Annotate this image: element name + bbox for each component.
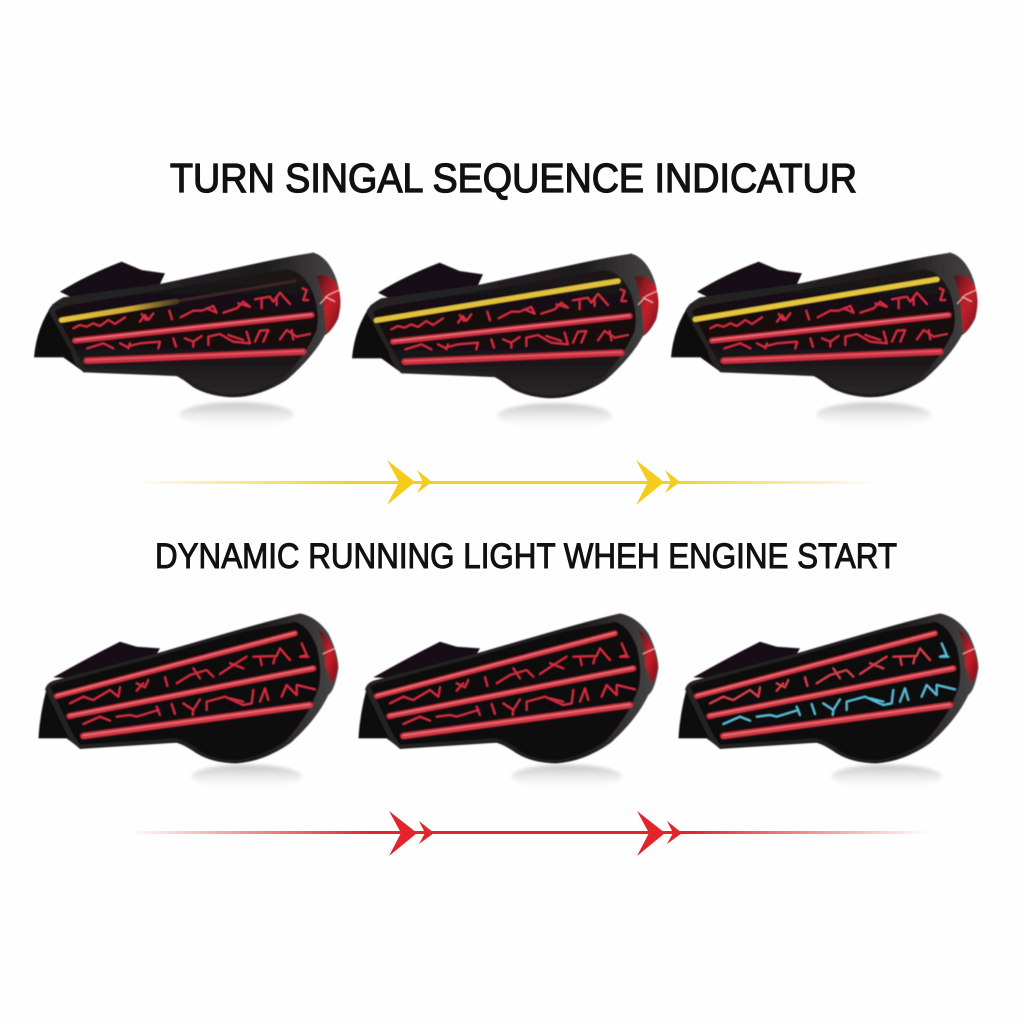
heading: dynamic running light: DYNAMIC RUNNING LIGHT WHEH ENGINE START: [155, 537, 897, 576]
arrow: red sequence direction: [130, 811, 930, 856]
tail light 6: running light with blue accents: [678, 613, 978, 789]
tail light 4: running light: [38, 613, 338, 789]
arrow: yellow sequence direction: [130, 460, 880, 505]
tail light 1: yellow bar starting: [34, 253, 340, 428]
tail light 3: yellow bar full: [671, 253, 977, 428]
tail light 5: running light: [358, 613, 658, 789]
heading: turn signal sequence: TURN SINGAL SEQUENCE INDICATUR: [170, 155, 857, 201]
tail light 2: yellow bar full: [352, 254, 658, 429]
